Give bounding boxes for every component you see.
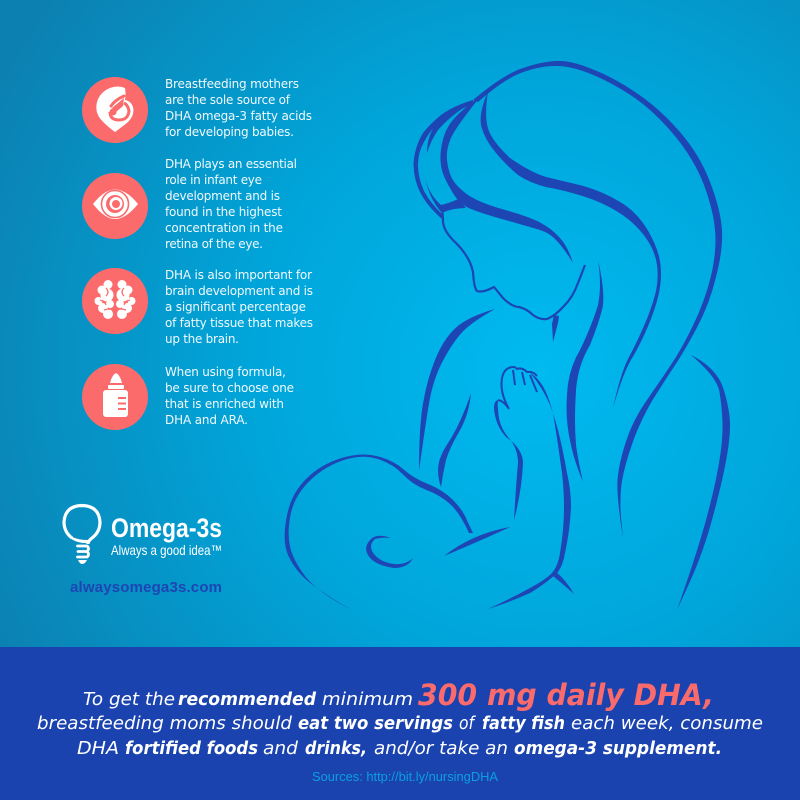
mother: left shoulder — [419, 309, 495, 471]
icon: light bulb — [64, 506, 100, 564]
text: eye development: development and is — [165, 189, 280, 203]
text: sources: Sources: http://bit.ly/nursingDHA — [312, 769, 498, 784]
text: line 2: fatty fish — [482, 713, 565, 734]
text: sole source: for developing babies. — [165, 125, 294, 139]
baby: body and back line — [488, 373, 571, 609]
text: line 3: drinks, — [305, 738, 367, 759]
icon: brain — [82, 268, 148, 334]
text: tagline: Always a good idea™ — [111, 542, 222, 558]
text: sole source: DHA omega-3 fatty acids — [165, 109, 312, 123]
text: line 1: 300 mg daily DHA, — [418, 678, 714, 712]
text: eye development: concentration in the — [165, 221, 283, 235]
text: eye development: role in infant eye — [165, 173, 262, 187]
text: line 1 — [83, 678, 714, 712]
fact 2: eye development — [82, 157, 297, 251]
text: brain development: of fatty tissue that makes — [165, 316, 313, 330]
text: formula: be sure to choose one — [165, 381, 294, 395]
baby: body crease — [553, 572, 574, 594]
baby: hand fingers — [498, 367, 537, 409]
text: brain development: up the brain. — [165, 332, 239, 346]
text: eye development: DHA plays an essential — [165, 157, 297, 171]
baby: head — [285, 454, 473, 610]
text: eye development: found in the highest — [165, 205, 282, 219]
text: sole source: are the sole source of — [165, 93, 291, 107]
text: line 1: recommended — [178, 689, 317, 710]
illustration: mother breastfeeding baby — [285, 61, 730, 610]
mother: right hair lock — [566, 260, 603, 482]
text: line 2: eat two servings — [298, 713, 453, 734]
text: sole source: Breastfeeding mothers — [165, 77, 299, 91]
mother: right arm — [677, 355, 730, 610]
baby: ear — [366, 536, 413, 568]
text: sole source — [165, 77, 312, 139]
mother: face profile — [442, 206, 585, 319]
text: brain development: a significant percentage — [165, 300, 306, 314]
panel: recommendation band — [0, 647, 800, 800]
text: brain development: DHA is also important for — [165, 268, 312, 282]
text: formula: DHA and ARA. — [165, 413, 248, 427]
icon: baby bottle — [82, 364, 148, 430]
mother: outer hair outline — [473, 61, 722, 538]
text: brain development — [165, 268, 313, 346]
text: line 3: DHA — [77, 738, 119, 759]
baby: arm line — [444, 527, 510, 556]
text: formula — [165, 365, 294, 427]
text: line 2: each week, consume — [571, 713, 763, 734]
text: formula: When using formula, — [165, 365, 286, 379]
text: brand name: Omega-3s — [111, 513, 222, 543]
mother: hair strands — [424, 102, 473, 213]
mother: breast line — [438, 393, 471, 487]
website: alwaysomega3s.com — [70, 579, 222, 596]
fact 3: brain development — [82, 268, 313, 346]
text: brain development: brain development and is — [165, 284, 313, 298]
text: line 3: omega-3 supplement. — [514, 738, 722, 759]
text: line 2: breastfeeding moms should — [37, 713, 293, 734]
text: line 3: fortified foods — [125, 738, 258, 759]
text: line 1: minimum — [322, 689, 413, 710]
text: eye development — [165, 157, 297, 251]
text: line 1: To get the — [83, 689, 175, 710]
baby: wrist — [494, 400, 523, 520]
text: line 2: of — [459, 713, 476, 734]
text: formula: that is enriched with — [165, 397, 284, 411]
icon: eye — [82, 173, 148, 239]
text: line 3: and — [263, 738, 299, 759]
text: line 2 — [37, 713, 763, 734]
logo: Omega-3s — [64, 506, 222, 564]
mother: left hair bump — [414, 100, 473, 219]
mother: inner hair arc — [481, 91, 661, 408]
fact 4: formula — [82, 364, 294, 430]
icon: mother and baby — [82, 77, 148, 143]
text: eye development: retina of the eye. — [165, 237, 263, 251]
text: line 3 — [77, 738, 722, 759]
mother: hair band — [440, 97, 573, 263]
text: line 3: and/or take an — [374, 738, 508, 759]
mother: chin detail — [552, 315, 559, 342]
fact 1: breastfeeding — [82, 77, 312, 143]
